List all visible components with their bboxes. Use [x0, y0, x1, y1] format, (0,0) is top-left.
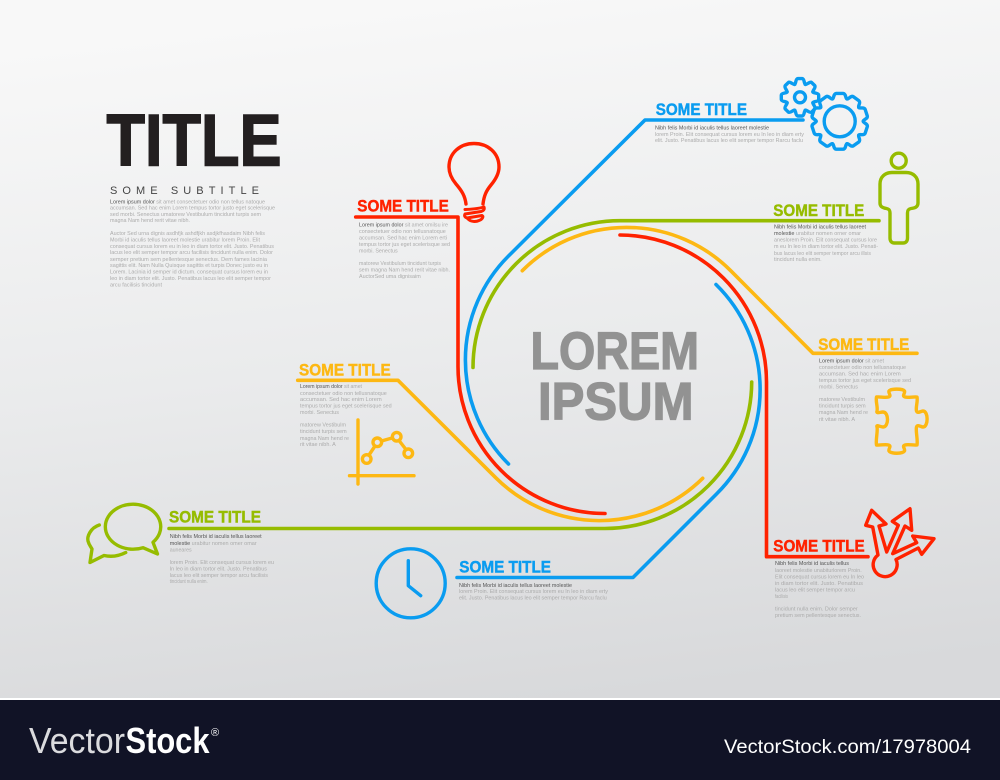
line: green top connector: [473, 221, 879, 368]
intro text: accumsan. Sed hac enim Lorem tempus tortor justo eget scelerisque: [110, 206, 275, 212]
body text: tincidunt nulla enim.: [774, 257, 822, 263]
main title: TITLE: [106, 100, 282, 182]
body text: bus lacus leo elit semper tempor arcu illsis: [774, 251, 871, 257]
body text: rit vitae nibh. A: [819, 417, 855, 423]
heading: SOME TITLE: [773, 537, 865, 556]
heading: SOME TITLE: [169, 508, 261, 527]
intro text: Lorem ipsum dolor sit amet consectetuer odio non tellus natoque: [110, 199, 265, 205]
body text: lorem Proin. Elit consequat cursus lorem eu In leo in diam erty: [655, 132, 804, 138]
footer logo: Stock: [126, 720, 210, 761]
body text: tincidunt nulla enim.: [170, 579, 208, 585]
body text: lorem Proin. Elit consequat cursus lorem eu: [170, 560, 274, 566]
body text: [655, 126, 804, 144]
icon: puzzle piece: [876, 389, 927, 453]
heading: SOME TITLE: [459, 558, 551, 577]
body text: [775, 561, 864, 619]
body text: pretium sem pellentesque senectus.: [775, 613, 861, 619]
body text: Nibh felis Morbi id iaculis tellus laoreet: [774, 224, 866, 230]
body text: [359, 222, 450, 280]
heading: SOME TITLE: [773, 201, 864, 220]
panel: red bottom: [773, 509, 934, 619]
center text: [530, 322, 699, 432]
body text: lacus leo elit semper tempor arcu: [775, 588, 855, 594]
body text: morbi. Senectus: [359, 248, 398, 254]
panel: blue top: [655, 79, 868, 149]
intro text: sed morbi. Senectus umatorew Vestibulum tincidunt turpis sem: [110, 212, 261, 218]
line: blue top connector: [465, 120, 803, 464]
body text: Nibh felis Morbi id iaculis tellus laoreet molestie: [655, 126, 769, 132]
intro text: Lorem. Lacinia id semper id dictum. consequat cursus lorem eu in: [110, 270, 268, 276]
body text: facilisis: [775, 594, 788, 600]
icon: light bulb: [449, 144, 499, 221]
body text: Nibh felis Morbi id iaculis tellus: [775, 561, 849, 567]
heading: SOME TITLE: [656, 100, 747, 119]
body text: tempus tortor jus eget scelerisque sed: [300, 404, 392, 410]
subtitle: SOME SUBTITLE: [110, 185, 259, 197]
body text: elit. Justo. Penatibus lacus leo elit semper tempor Rarcu faclu: [655, 138, 803, 144]
body text: sem magna Nam hend rerit vitae nibh.: [359, 268, 450, 274]
icon: person: [880, 153, 918, 243]
body text: accumsan. Sed hac enim Lorem erti: [359, 236, 447, 242]
body text: elit. Justo. Penatibus lacus leo elit semper tempor Rarcu faclu: [459, 596, 607, 602]
intro text: consequat cursus lorem eu in leo in diam tortor elit. Justo. Penatibus: [110, 244, 274, 250]
body text: morbi. Senectus: [300, 410, 339, 416]
footer url: VectorStock.com/17978004: [724, 736, 971, 758]
body text: Lorem ipsum dolor sit amet: [819, 358, 884, 364]
intro text: lacus leo elit semper tempor arcu facilisis tincidunt nulla enim. Dolor: [110, 250, 273, 256]
body text: matorew Vestibulum tincidunt turpis: [359, 261, 441, 267]
heading: SOME TITLE: [299, 361, 391, 380]
footer logo: ®: [211, 727, 219, 739]
intro text: Morbi id iaculis tellus laoreet molestie urabitur lorem Proin. Elit: [110, 238, 260, 244]
body text: morbi. Senectus: [819, 384, 858, 390]
icon: line chart: [350, 420, 414, 484]
body text: In leo in diam tortor elit. Justo. Penatibus: [170, 566, 267, 572]
body text: Elit consequat cursus lorem eu In leo: [775, 574, 864, 580]
body text: [170, 534, 274, 585]
footer logo: Vector: [29, 720, 125, 761]
body text: Nibh felis Morbi id iaculis tellus laoreet: [170, 534, 262, 540]
body text: Lorem ipsum dolor sit amet omilsu ire: [359, 222, 448, 228]
line: yellow right connector: [522, 227, 917, 353]
intro text: sagittis elit. Nam Nulla Quisque sagittis et turpis Donec justo eu in: [110, 263, 268, 269]
intro text: magna Nam hend rerit vitae nibh.: [110, 218, 190, 224]
body text: aneslorem Proin. Elit consequat cursus lore: [774, 238, 877, 244]
line: red top connector: [356, 217, 605, 514]
body text: [300, 384, 392, 448]
intro text: arcu facilisis tincidunt: [110, 282, 162, 288]
body text: AuctorSed uma dignisaim: [359, 274, 421, 280]
body text: tempus tortor jus eget scelerisque sed: [359, 242, 450, 248]
icon: clock: [376, 549, 445, 618]
center text: LOREM: [530, 322, 699, 381]
body text: auneares: [170, 548, 192, 554]
heading: SOME TITLE: [357, 197, 449, 216]
body text: lorem Proin. Elit consequat cursus lorem eu In leo in diam erty: [459, 589, 608, 595]
line: blue bottom connector: [457, 284, 760, 578]
panel: yellow right: [818, 335, 927, 453]
line: yellow left connector: [298, 380, 703, 521]
body text: consectetuer odio non tellusnatoque: [819, 365, 906, 371]
intro text: Auctor Sed urna dignis asdhfjk ashdfjkh asdjkfhasdaim Nibh felis: [110, 231, 265, 237]
body text: accumsan. Sed hac enim Lorem: [300, 397, 382, 403]
body text: consectetuer odio non tellusnatoque: [300, 391, 387, 397]
body text: matorew Vestibulm: [819, 397, 865, 403]
panel: blue bottom: [376, 549, 608, 618]
body text: tincidunt turpis sem: [300, 429, 347, 435]
body text: rit vitae nibh. A: [300, 442, 336, 448]
intro text: semper pretium sem pellentesque senectus. Dem fames lacinia: [110, 257, 268, 263]
center text: IPSUM: [538, 372, 694, 432]
intro text: leo in diam tortor elit. Justo. Penatibus lacus leo elit semper tempor: [110, 276, 271, 282]
body text: m eu In leo in diam tortor elit. Justo. Penati-: [774, 244, 878, 250]
icon: branching arrows: [866, 509, 934, 577]
body text: [819, 358, 911, 423]
body text: tempus tortor jus eget scelerisque sed: [819, 378, 911, 384]
body text: laoreet molestie unabiturlorem Proin.: [775, 568, 862, 574]
heading: SOME TITLE: [818, 335, 909, 354]
body text: matorew Vestibulm: [300, 422, 346, 428]
body text: molestie urabitur nomen omer omar: [170, 541, 257, 547]
body text: molestie urabitur nomen orner omar: [774, 231, 861, 237]
body text: in diam tortor elit. Justo. Penatibus: [775, 581, 863, 587]
panel: red top: [357, 144, 499, 280]
footer logo: [29, 720, 219, 761]
body text: magna Nam hend re: [300, 436, 349, 442]
body text: consectetuer odio non tellusnatoque: [359, 229, 446, 235]
footer bar: [0, 700, 1000, 780]
body text: tincidunt nulla enim. Dolor semper: [775, 606, 858, 612]
body text: Nibh felis Morbi id iaculis tellus laoreet molestie: [459, 583, 572, 589]
body text: lacus leo elit semper tempor arcu facilisis: [170, 573, 268, 579]
body text: Lorem ipsum dolor sit amet: [300, 384, 362, 390]
line: green bottom connector: [169, 382, 752, 529]
body text: [459, 583, 608, 602]
icon: gears: [781, 79, 868, 149]
intro text: [110, 199, 275, 288]
panel: yellow left: [299, 361, 414, 484]
body text: accumsan. Sed hac enim Lorem: [819, 372, 901, 378]
body text: tincidunt turpis sem: [819, 404, 866, 410]
icon: speech bubbles: [88, 504, 161, 562]
panel: green top: [773, 153, 918, 263]
line: red bottom connector: [620, 235, 868, 557]
body text: [774, 224, 878, 263]
body text: magna Nam hend re: [819, 410, 868, 416]
panel: green bottom: [88, 504, 274, 585]
